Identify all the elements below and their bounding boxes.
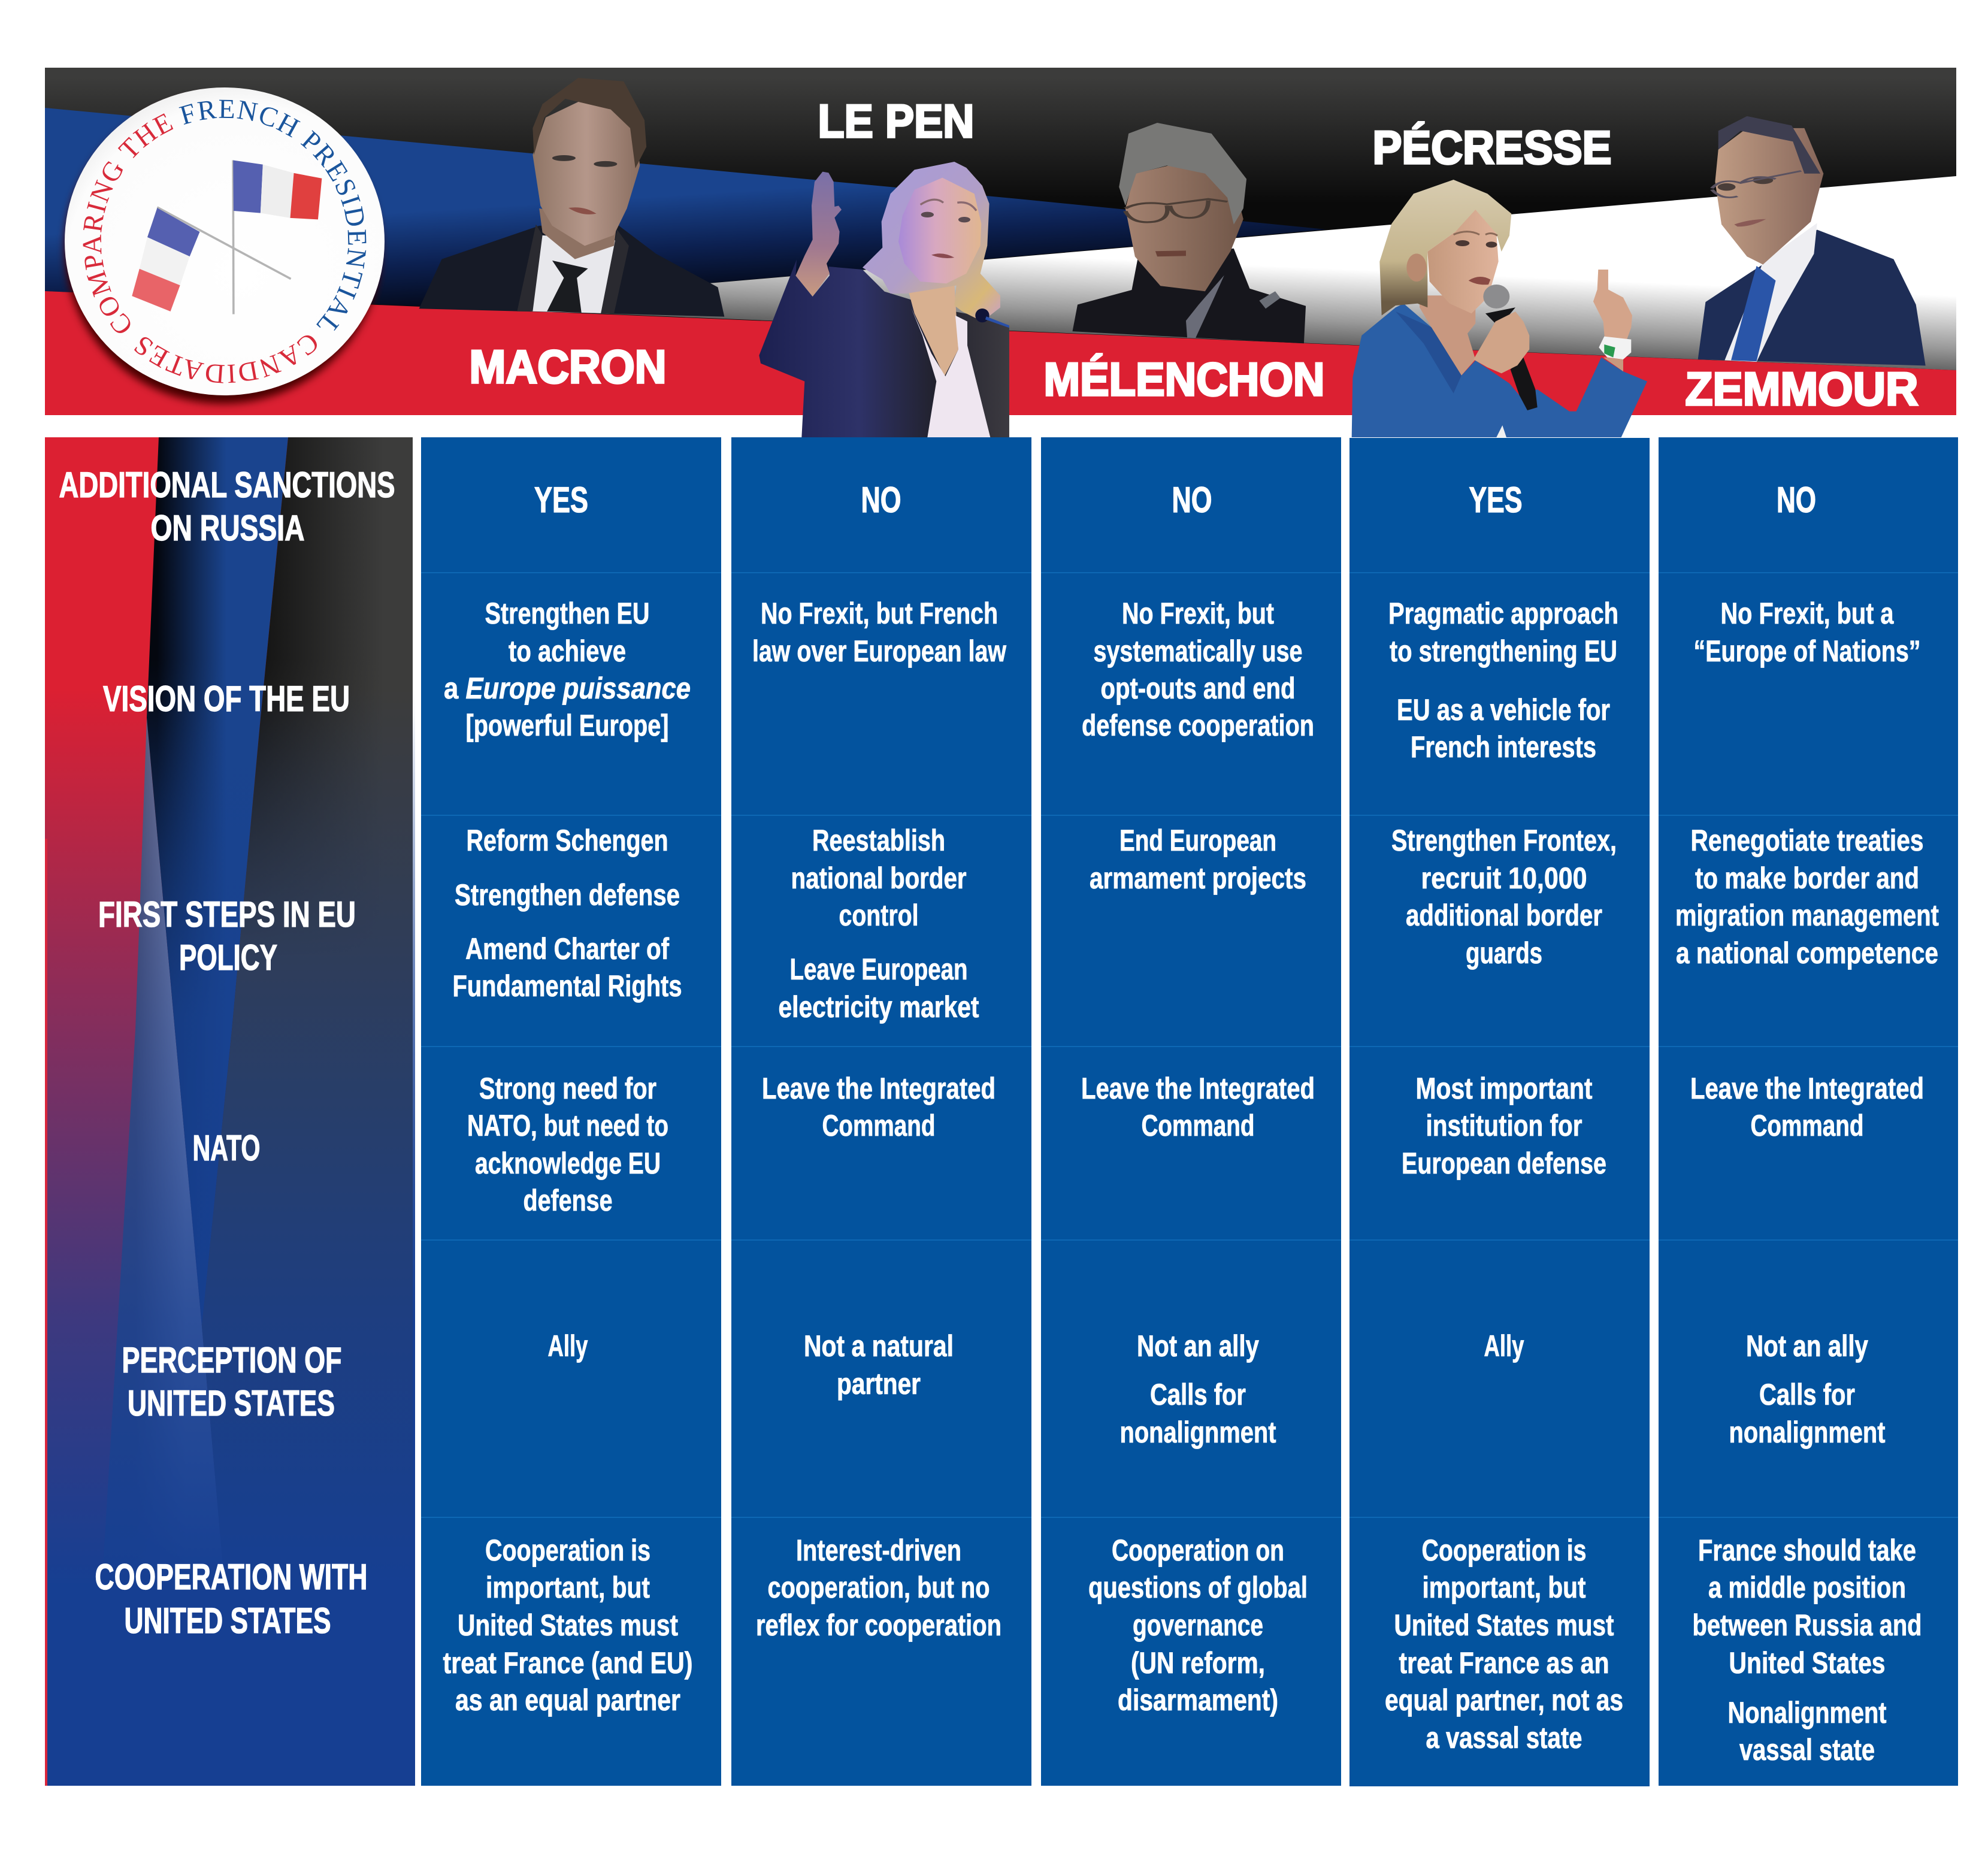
- badge: comparing the French presidential candidates: [59, 87, 386, 410]
- Pecresse: first steps: additional border: [1406, 899, 1602, 932]
- Le Pen: perception: Not a natural: [804, 1329, 954, 1363]
- panel: Macron column: [421, 437, 721, 1786]
- Pecresse: first steps: guards: [1466, 936, 1542, 970]
- Zemmour: first steps: [1675, 824, 1939, 970]
- photo: Melenchon: [1073, 123, 1306, 343]
- candidate name: Le Pen: LE PEN: [818, 95, 974, 147]
- Le Pen: perception: partner: [837, 1367, 921, 1401]
- header banner: [45, 68, 1956, 415]
- label: first steps in EU policy: FIRST STEPS IN EU: [98, 894, 356, 935]
- Pecresse: cooperation: important, but: [1422, 1571, 1586, 1604]
- Zemmour: first steps: to make border and: [1695, 861, 1919, 895]
- Le Pen: first steps: Leave European: [789, 952, 968, 986]
- Melenchon: perception: [1120, 1329, 1276, 1449]
- Le Pen: first steps: Reestablish: [812, 824, 945, 857]
- panel: row labels: [45, 437, 415, 1786]
- Macron: vision: [powerful Europe]: [466, 709, 668, 742]
- label: additional sanctions on Russia: ADDITIONAL SANCTIONS: [59, 465, 395, 505]
- Melenchon: cooperation: governance: [1133, 1608, 1263, 1642]
- Pecresse: cooperation: Cooperation is: [1422, 1534, 1586, 1567]
- label: cooperation with United States: COOPERATION WITH: [95, 1557, 368, 1597]
- Zemmour: cooperation: France should take: [1698, 1534, 1916, 1567]
- Melenchon: cooperation: (UN reform,: [1131, 1646, 1265, 1680]
- Zemmour: vision: [1694, 597, 1920, 668]
- Le Pen: NATO: Command: [822, 1109, 936, 1142]
- Le Pen: vision: law over European law: [752, 634, 1006, 668]
- Zemmour: cooperation: between Russia and: [1693, 1608, 1922, 1642]
- label: vision of the EU: VISION OF THE EU: [103, 679, 350, 719]
- Macron: cooperation: as an equal partner: [455, 1683, 680, 1717]
- Macron: first steps: [453, 824, 682, 1003]
- label: perception of United States: PERCEPTION OF: [122, 1340, 341, 1380]
- Macron: cooperation: [443, 1534, 692, 1717]
- label: additional sanctions on Russia: ON RUSSIA: [151, 508, 304, 548]
- Pecresse: cooperation: equal partner, not as: [1385, 1683, 1623, 1717]
- label: cooperation with United States: UNITED STATES: [125, 1601, 331, 1641]
- Melenchon: cooperation: questions of global: [1088, 1571, 1308, 1604]
- candidate name: Pecresse: PÉCRESSE: [1373, 121, 1611, 174]
- label: NATO: NATO: [193, 1128, 260, 1168]
- Pecresse: perception: Ally: [1484, 1329, 1524, 1363]
- Pecresse: NATO: institution for: [1426, 1109, 1582, 1142]
- Zemmour: cooperation: Nonalignment: [1727, 1696, 1887, 1729]
- Zemmour: vision: No Frexit, but a: [1720, 597, 1894, 630]
- Le Pen: first steps: control: [839, 899, 919, 932]
- photo: Pecresse: [1352, 180, 1647, 437]
- Macron: NATO: acknowledge EU: [475, 1147, 661, 1180]
- Le Pen: NATO: Leave the Integrated: [762, 1072, 995, 1105]
- Zemmour: vision: “Europe of Nations”: [1694, 634, 1920, 668]
- label: cooperation with United States: [95, 1557, 368, 1641]
- Le Pen: vision: [752, 597, 1006, 668]
- Macron: cooperation: treat France (and EU): [443, 1646, 692, 1680]
- candidate name: Macron: MACRON: [470, 340, 666, 393]
- Macron: vision: to achieve: [509, 634, 626, 668]
- Macron: vision: Strengthen EU: [485, 597, 649, 630]
- Melenchon: first steps: armament projects: [1090, 861, 1306, 895]
- Zemmour: perception: nonalignment: [1729, 1416, 1886, 1449]
- Macron: first steps: Strengthen defense: [455, 878, 680, 912]
- Melenchon: NATO: Command: [1142, 1109, 1254, 1142]
- Le Pen: first steps: [779, 824, 979, 1024]
- photo: Zemmour: [1698, 116, 1926, 365]
- Melenchon: sanctions: NO: [1172, 480, 1212, 520]
- Melenchon: NATO: [1081, 1072, 1315, 1142]
- Melenchon: cooperation: disarmament): [1118, 1683, 1278, 1717]
- label: additional sanctions on Russia: [59, 465, 395, 548]
- Melenchon: perception: nonalignment: [1120, 1416, 1276, 1449]
- Macron: perception: Ally: [547, 1329, 588, 1363]
- Macron: first steps: Reform Schengen: [466, 824, 668, 857]
- Pecresse: cooperation: treat France as an: [1399, 1646, 1609, 1680]
- Pecresse: vision: to strengthening EU: [1390, 634, 1617, 668]
- Macron: NATO: defense: [524, 1184, 612, 1217]
- Melenchon: vision: defense cooperation: [1082, 709, 1314, 742]
- Macron: cooperation: important, but: [486, 1571, 650, 1604]
- label: perception of United States: UNITED STATES: [128, 1383, 335, 1423]
- Zemmour: cooperation: United States: [1729, 1646, 1886, 1680]
- Zemmour: NATO: [1690, 1072, 1924, 1142]
- Le Pen: cooperation: reflex for cooperation: [756, 1608, 1001, 1642]
- candidate name: Zemmour: ZEMMOUR: [1686, 362, 1918, 415]
- Le Pen: cooperation: cooperation, but no: [768, 1571, 990, 1604]
- candidate name: Melenchon: MÉLENCHON: [1043, 353, 1325, 406]
- photo: Macron: [419, 78, 724, 317]
- Melenchon: cooperation: Cooperation on: [1112, 1534, 1284, 1567]
- Zemmour: cooperation: vassal state: [1739, 1733, 1875, 1767]
- Pecresse: vision: Pragmatic approach: [1388, 597, 1618, 630]
- Pecresse: first steps: [1391, 824, 1617, 970]
- Melenchon: cooperation: [1088, 1534, 1308, 1717]
- Macron: vision: [444, 597, 691, 742]
- Pecresse: first steps: Strengthen Frontex,: [1391, 824, 1617, 857]
- Pecresse: NATO: European defense: [1402, 1147, 1606, 1180]
- Pecresse: first steps: recruit 10,000: [1421, 861, 1587, 895]
- Pecresse: vision: EU as a vehicle for: [1397, 693, 1610, 727]
- label: perception of United States: [122, 1340, 341, 1423]
- Macron: first steps: Fundamental Rights: [453, 969, 682, 1003]
- badge circular text: COMPARING THE FRENCH PRESIDENTIAL CANDIDATES: [83, 99, 367, 383]
- Le Pen: first steps: electricity market: [779, 990, 979, 1024]
- Pecresse: cooperation: a vassal state: [1426, 1721, 1582, 1755]
- Le Pen: vision: No Frexit, but French: [761, 597, 998, 630]
- Le Pen: cooperation: [756, 1534, 1001, 1642]
- Macron: vision: a Europe puissance: [444, 672, 691, 705]
- Macron: NATO: [467, 1072, 668, 1217]
- Zemmour: NATO: Leave the Integrated: [1690, 1072, 1924, 1105]
- panel: Le Pen column: [731, 437, 1031, 1786]
- Pecresse: cooperation: [1385, 1534, 1623, 1755]
- Melenchon: vision: systematically use: [1094, 634, 1302, 668]
- Zemmour: perception: [1729, 1329, 1886, 1449]
- Pecresse: cooperation: United States must: [1394, 1608, 1614, 1642]
- Zemmour: sanctions: NO: [1777, 480, 1816, 520]
- photo: Le Pen: [759, 162, 1009, 437]
- Macron: NATO: Strong need for: [479, 1072, 656, 1105]
- Macron: first steps: Amend Charter of: [465, 932, 669, 966]
- Zemmour: perception: Calls for: [1759, 1378, 1855, 1411]
- Macron: cooperation: United States must: [458, 1608, 678, 1642]
- Macron: NATO: NATO, but need to: [467, 1109, 668, 1142]
- Pecresse: sanctions: YES: [1469, 480, 1523, 520]
- Pecresse: NATO: [1402, 1072, 1606, 1180]
- Le Pen: first steps: national border: [791, 861, 967, 895]
- Le Pen: sanctions: NO: [861, 480, 901, 520]
- Melenchon: vision: No Frexit, but: [1122, 597, 1274, 630]
- Le Pen: cooperation: Interest-driven: [796, 1534, 961, 1567]
- Melenchon: first steps: End European: [1119, 824, 1276, 857]
- Zemmour: cooperation: a middle position: [1708, 1571, 1906, 1604]
- Zemmour: perception: Not an ally: [1746, 1329, 1868, 1363]
- panel: Pecresse column: [1349, 438, 1650, 1786]
- icon: crossed French flags: [132, 160, 322, 314]
- Macron: sanctions: YES: [534, 480, 588, 520]
- Melenchon: first steps: [1090, 824, 1306, 895]
- Melenchon: perception: Not an ally: [1137, 1329, 1259, 1363]
- label: first steps in EU policy: POLICY: [179, 937, 277, 978]
- Pecresse: vision: [1388, 597, 1618, 764]
- panel: Melenchon column: [1041, 437, 1341, 1786]
- label: first steps in EU policy: [98, 894, 356, 978]
- Zemmour: cooperation: [1693, 1534, 1922, 1767]
- Macron: cooperation: Cooperation is: [485, 1534, 650, 1567]
- Melenchon: vision: [1082, 597, 1314, 742]
- Le Pen: perception: [804, 1329, 954, 1401]
- Pecresse: vision: French interests: [1411, 730, 1596, 764]
- Zemmour: NATO: Command: [1750, 1109, 1864, 1142]
- Zemmour: first steps: Renegotiate treaties: [1690, 824, 1924, 857]
- Melenchon: perception: Calls for: [1150, 1378, 1246, 1411]
- Pecresse: NATO: Most important: [1416, 1072, 1593, 1105]
- panel: Zemmour column: [1659, 437, 1958, 1786]
- Melenchon: vision: opt-outs and end: [1101, 672, 1295, 705]
- Le Pen: NATO: [762, 1072, 995, 1142]
- Melenchon: NATO: Leave the Integrated: [1081, 1072, 1315, 1105]
